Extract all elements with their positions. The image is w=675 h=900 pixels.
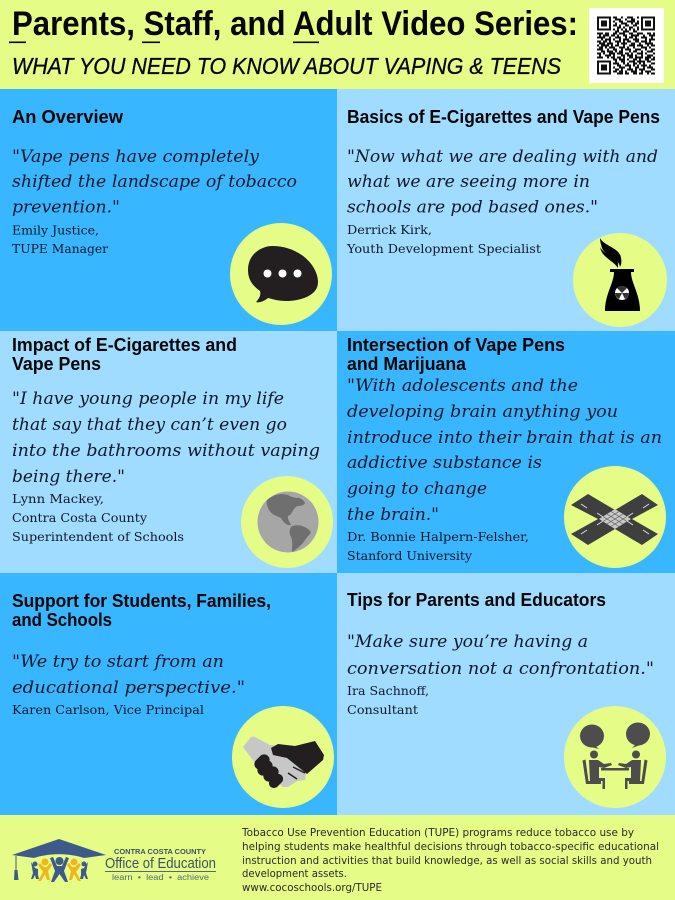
attribution: karen carlson: Karen Carlson, Vice Principal [12,703,204,717]
icon: handshake [232,706,334,808]
footer text: instruction and activities that build knowledge, as well as social skills and youth [242,854,652,867]
logo: contra costa county office of education: learn • lead • achieve [112,873,210,882]
heading: support: and Schools [12,610,112,630]
footer text: Tobacco Use Prevention Education (TUPE) programs reduce tobacco use by [241,826,634,839]
heading: intersection [347,335,565,374]
quote: young people: into the bathrooms without vaping [12,441,320,461]
heading: an overview: An Overview [12,107,124,127]
QR code [589,8,664,83]
attribution: bonnie halpern-felsher [347,530,529,563]
heading: support [12,591,271,630]
quote: vape pens [12,147,297,218]
quote: young people: being there." [12,467,125,487]
attribution: derrick kirk [346,223,541,256]
logo: contra costa county office of education: Office of Education [105,855,216,872]
heading: intersection: and Marijuana [347,354,467,374]
quote: educational perspective [12,652,245,698]
panel: tips [337,573,675,815]
icon: road intersection [564,466,666,568]
attribution: lynn mackey: Contra Costa County [12,511,147,525]
footer text [241,826,659,894]
subtitle: WHAT YOU NEED TO KNOW ABOUT VAPING & TEENS [12,53,562,79]
footer text: development assets. [242,867,347,880]
attribution: emily justice: TUPE Manager [12,242,108,256]
icon: speech bubble [230,223,332,325]
quote: educational perspective: educational perspective." [12,678,245,698]
logo: contra costa county office of education [12,839,216,882]
quote: pod based: what we are seeing more in [347,172,590,192]
quote: developing brain: the brain." [347,505,439,525]
footer [0,815,675,900]
quote: educational perspective: "We try to start from an [12,652,224,672]
quote: developing brain: addictive substance is [347,453,542,473]
attribution: ira sachnoff: Ira Sachnoff, [347,684,429,698]
quote: developing brain: going to change [347,479,487,499]
quote: developing brain [347,376,662,525]
icon: two people talking at table [564,706,666,808]
attribution: lynn mackey: Superintendent of Schools [12,530,184,544]
panel: basics [337,89,675,331]
quote: conversation: conversation not a confrontation." [347,659,654,679]
heading: basics: Basics of E-Cigarettes and Vape Pens [347,107,660,127]
quote: conversation [347,632,654,679]
attribution: emily justice [12,224,108,256]
attribution: lynn mackey: Lynn Mackey, [12,492,104,506]
logo: contra costa county office of education: CONTRA COSTA COUNTY [114,849,206,856]
heading: impact: Vape Pens [12,354,101,374]
footer text: www.cocoschools.org/TUPE [242,881,382,894]
panel: support [0,573,337,815]
attribution: ira sachnoff [347,684,429,717]
attribution: ira sachnoff: Consultant [347,703,418,717]
heading: impact [12,335,237,374]
quote: young people: that say that they can’t even go [12,415,287,435]
attribution: derrick kirk: Derrick Kirk, [347,223,432,237]
icon: vape cooling tower [573,233,667,327]
heading: support: Support for Students, Families, [12,591,271,611]
quote: pod based: "Now what we are dealing with and [347,147,658,167]
quote: young people: "I have young people in my life [12,389,284,409]
attribution: lynn mackey [12,492,184,544]
attribution: emily justice: Emily Justice, [12,224,99,238]
quote: developing brain: introduce into their brain that is an [347,428,662,448]
heading: impact: Impact of E-Cigarettes and [12,335,237,355]
footer text: helping students make healthful decisions through tobacco-specific educational [242,840,659,853]
panel: intersection [337,331,675,573]
attribution: bonnie halpern-felsher: Dr. Bonnie Halpern-Felsher, [347,530,529,544]
icon: globe [241,476,333,568]
quote: young people [12,389,320,487]
title: Parents, Staff, and Adult Video Series: [12,5,578,43]
quote: pod based [347,147,658,218]
quote: vape pens: prevention." [12,198,120,218]
heading: tips: Tips for Parents and Educators [347,590,606,610]
panel: an overview [0,89,337,331]
panel: impact [0,331,337,573]
quote: developing brain: developing brain anything you [347,402,618,422]
quote: developing brain: "With adolescents and the [347,376,578,396]
attribution: derrick kirk: Youth Development Specialist [346,242,541,256]
quote: conversation: "Make sure you’re having a [347,632,588,652]
quote: pod based: schools are pod based ones." [347,198,598,218]
header [9,5,664,83]
attribution: bonnie halpern-felsher: Stanford University [347,549,472,563]
heading: intersection: Intersection of Vape Pens [347,335,565,355]
quote: vape pens: "Vape pens have completely [12,147,259,167]
quote: vape pens: shifted the landscape of tobacco [12,172,297,192]
